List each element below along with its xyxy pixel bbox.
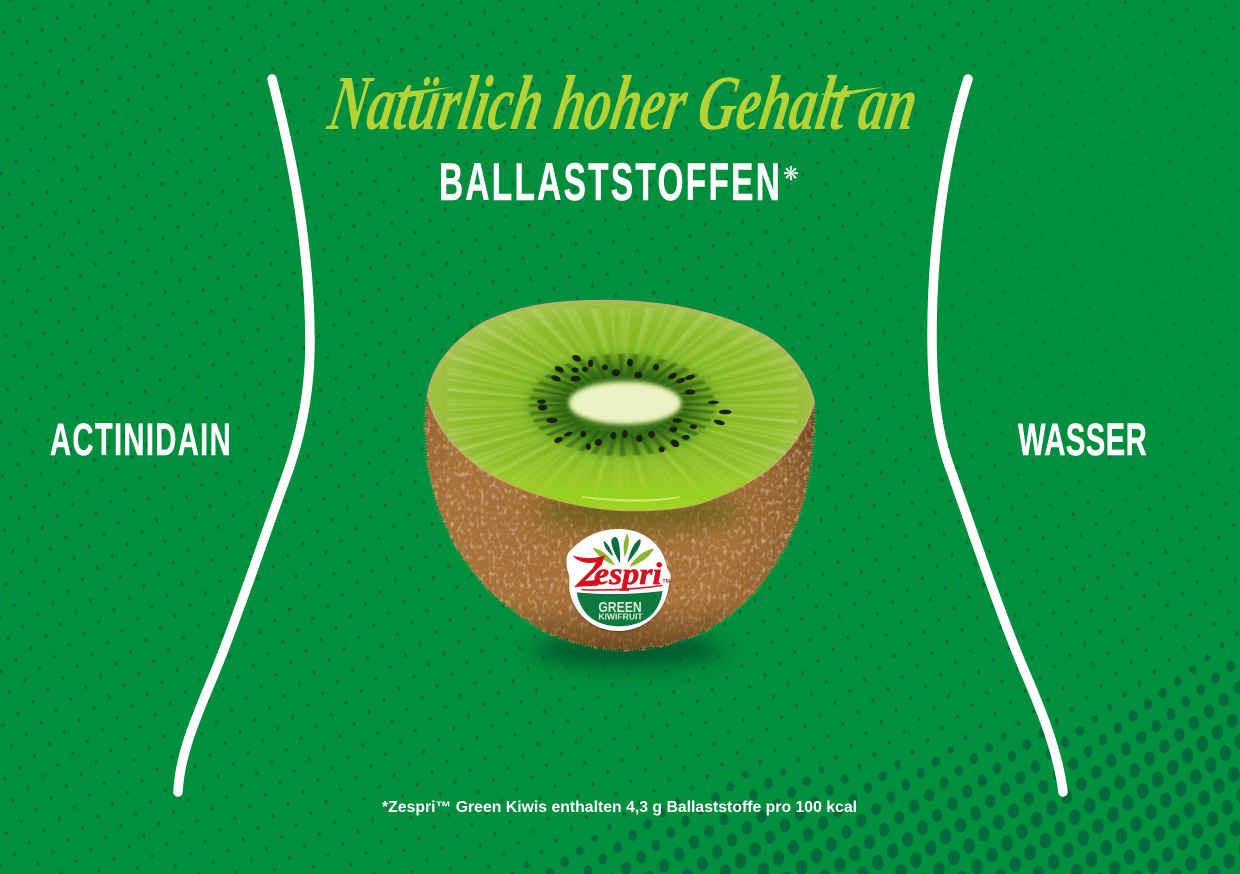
halftone dots bottom right [480, 620, 1240, 874]
label: Actinidain: ACTINIDAIN [50, 416, 231, 466]
left body contour line [178, 79, 310, 792]
sticker leaf fan [593, 533, 654, 567]
sticker bowl [577, 591, 663, 626]
sticker kiwifruit text: KIWIFRUIT [598, 612, 643, 621]
kiwi core [570, 383, 680, 423]
sticker wordmark: espri [594, 557, 663, 591]
kiwi skin [420, 395, 820, 655]
label: Wasser: WASSER [1018, 416, 1147, 466]
kiwi fuzz [425, 395, 815, 650]
sticker base [566, 529, 671, 631]
zespri sticker [566, 529, 671, 632]
kiwi half illustration [420, 295, 820, 655]
title script line [322, 61, 924, 147]
kiwi flesh [420, 295, 820, 515]
footnote: *Zespri™ Green Kiwis enthalten 4,3 g Ballaststoffe pro 100 kcal [382, 799, 857, 816]
title script line: Natürlich hoher Gehalt an [322, 61, 924, 147]
sticker green text: GREEN [598, 600, 642, 616]
sticker tm mark: TM [662, 579, 671, 585]
right body contour line [932, 79, 1063, 792]
kiwi shadow [533, 635, 723, 665]
title bold line: ❋ [783, 163, 799, 185]
kiwi seeds [537, 354, 732, 452]
title bold line: BALLASTSTOFFEN [439, 153, 780, 212]
